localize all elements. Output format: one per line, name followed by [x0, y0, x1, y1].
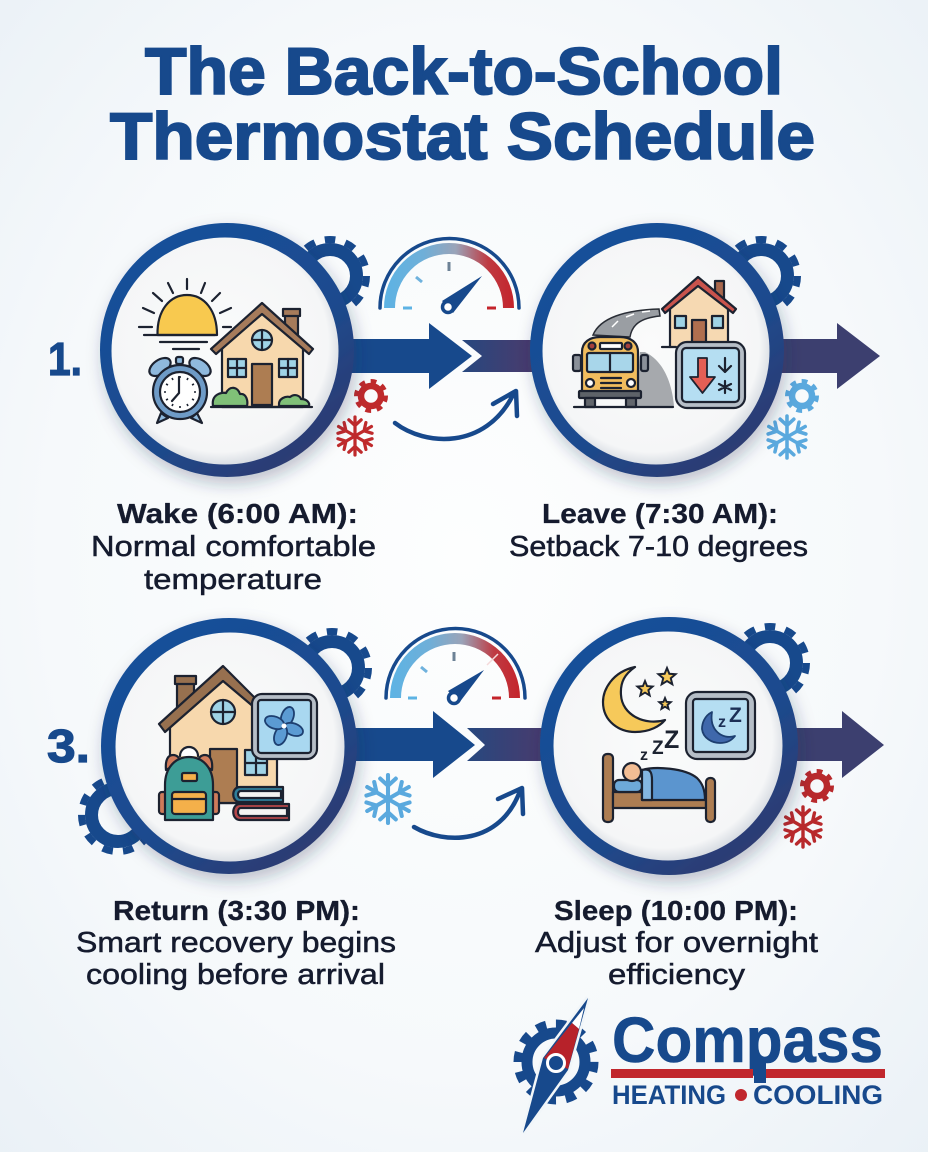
blue snowflake: step 2 — [765, 416, 809, 458]
arrow: step 1 to 2, dark — [462, 340, 545, 372]
red snowflake: step 4 — [782, 807, 824, 847]
logo compass needle — [523, 998, 588, 1133]
gear: step 1 — [294, 240, 366, 312]
logo gear — [518, 1024, 594, 1100]
curved arrow: top row — [395, 391, 517, 439]
step number 3: 3. — [47, 720, 90, 772]
text block: leave: Leave (7:30 AM): — [542, 498, 778, 529]
text block: return: cooling before arrival — [86, 959, 385, 991]
text block: wake: Wake (6:00 AM): — [117, 498, 358, 529]
gauge: bottom row — [386, 629, 525, 704]
icon: thermostat night mode: Z — [729, 704, 742, 727]
blue snowflake: step 3 — [363, 775, 413, 823]
panel: step 4 sleep circle — [540, 617, 798, 875]
title: Thermostat Schedule — [110, 99, 815, 173]
panel: step 1 wake circle — [100, 223, 354, 477]
icon: school bus — [573, 337, 673, 407]
arrow: step 3 to 4, dark — [467, 728, 560, 761]
curved arrow: bottom row — [414, 788, 523, 838]
icon: backpack — [159, 747, 219, 820]
icon: books — [233, 787, 289, 820]
text block: return: Smart recovery begins — [76, 927, 396, 959]
text block: leave: Setback 7-10 degrees — [509, 531, 808, 563]
logo tagline — [612, 1080, 883, 1110]
icon: zzz: Z — [664, 726, 679, 754]
icon: bed with sleeper — [603, 754, 715, 822]
red gear: step 4 — [802, 772, 832, 800]
icon: zzz — [640, 726, 679, 764]
icon: thermostat night mode: z — [718, 714, 726, 731]
gear: step 4 — [734, 626, 806, 700]
text block: sleep: Sleep (10:00 PM): — [554, 895, 798, 926]
logo red bar — [611, 1058, 885, 1083]
gauge: top row — [380, 239, 519, 313]
text block: return — [76, 895, 396, 991]
gear: step 3 bottom left — [82, 778, 154, 852]
text block: sleep: Adjust for overnight — [535, 927, 818, 959]
icon: thermostat night mode — [686, 692, 755, 759]
arrow: step 1 to 2, blue — [340, 323, 472, 389]
gear: step 2 — [724, 240, 798, 312]
logo: Compass Heating Cooling — [518, 998, 885, 1133]
icon: road — [593, 309, 674, 406]
logo tagline: HEATING — [612, 1080, 726, 1110]
text block: wake — [91, 498, 376, 596]
text block: sleep: efficiency — [608, 959, 746, 991]
arrow: step 2 exit — [770, 323, 880, 389]
icon: house — [159, 666, 277, 803]
icon: thermostat setback — [676, 342, 745, 408]
text block: wake: Normal comfortable — [91, 531, 376, 563]
text block: wake: temperature — [144, 564, 322, 596]
logo tagline: COOLING — [753, 1080, 883, 1110]
blue gear: step 2 — [788, 382, 816, 410]
panel: step 2 leave circle — [530, 223, 784, 477]
title — [110, 34, 815, 173]
text block: return: Return (3:30 PM): — [113, 895, 360, 926]
arrow: step 4 exit — [780, 711, 884, 778]
arrow: step 3 to 4, blue — [345, 711, 475, 778]
icon: house — [662, 277, 736, 347]
panel: step 3 return circle — [101, 618, 357, 874]
icon: alarm clock — [146, 354, 214, 423]
step number 1: 1. — [48, 333, 82, 385]
text block: sleep — [535, 895, 818, 991]
logo wordmark: Compass — [612, 1004, 883, 1076]
red snowflake: step 1 — [335, 417, 375, 455]
text block: leave — [509, 498, 808, 563]
icon: rising sun — [139, 279, 231, 349]
icon: fan unit — [252, 694, 317, 759]
icon: moon and stars — [603, 667, 676, 732]
icon: house — [211, 303, 313, 407]
icon: zzz: Z — [652, 738, 664, 759]
icon: zzz: z — [640, 747, 648, 764]
title: The Back-to-School — [145, 34, 783, 108]
gear: step 3 top — [296, 632, 368, 704]
red gear: step 1 — [356, 382, 386, 410]
